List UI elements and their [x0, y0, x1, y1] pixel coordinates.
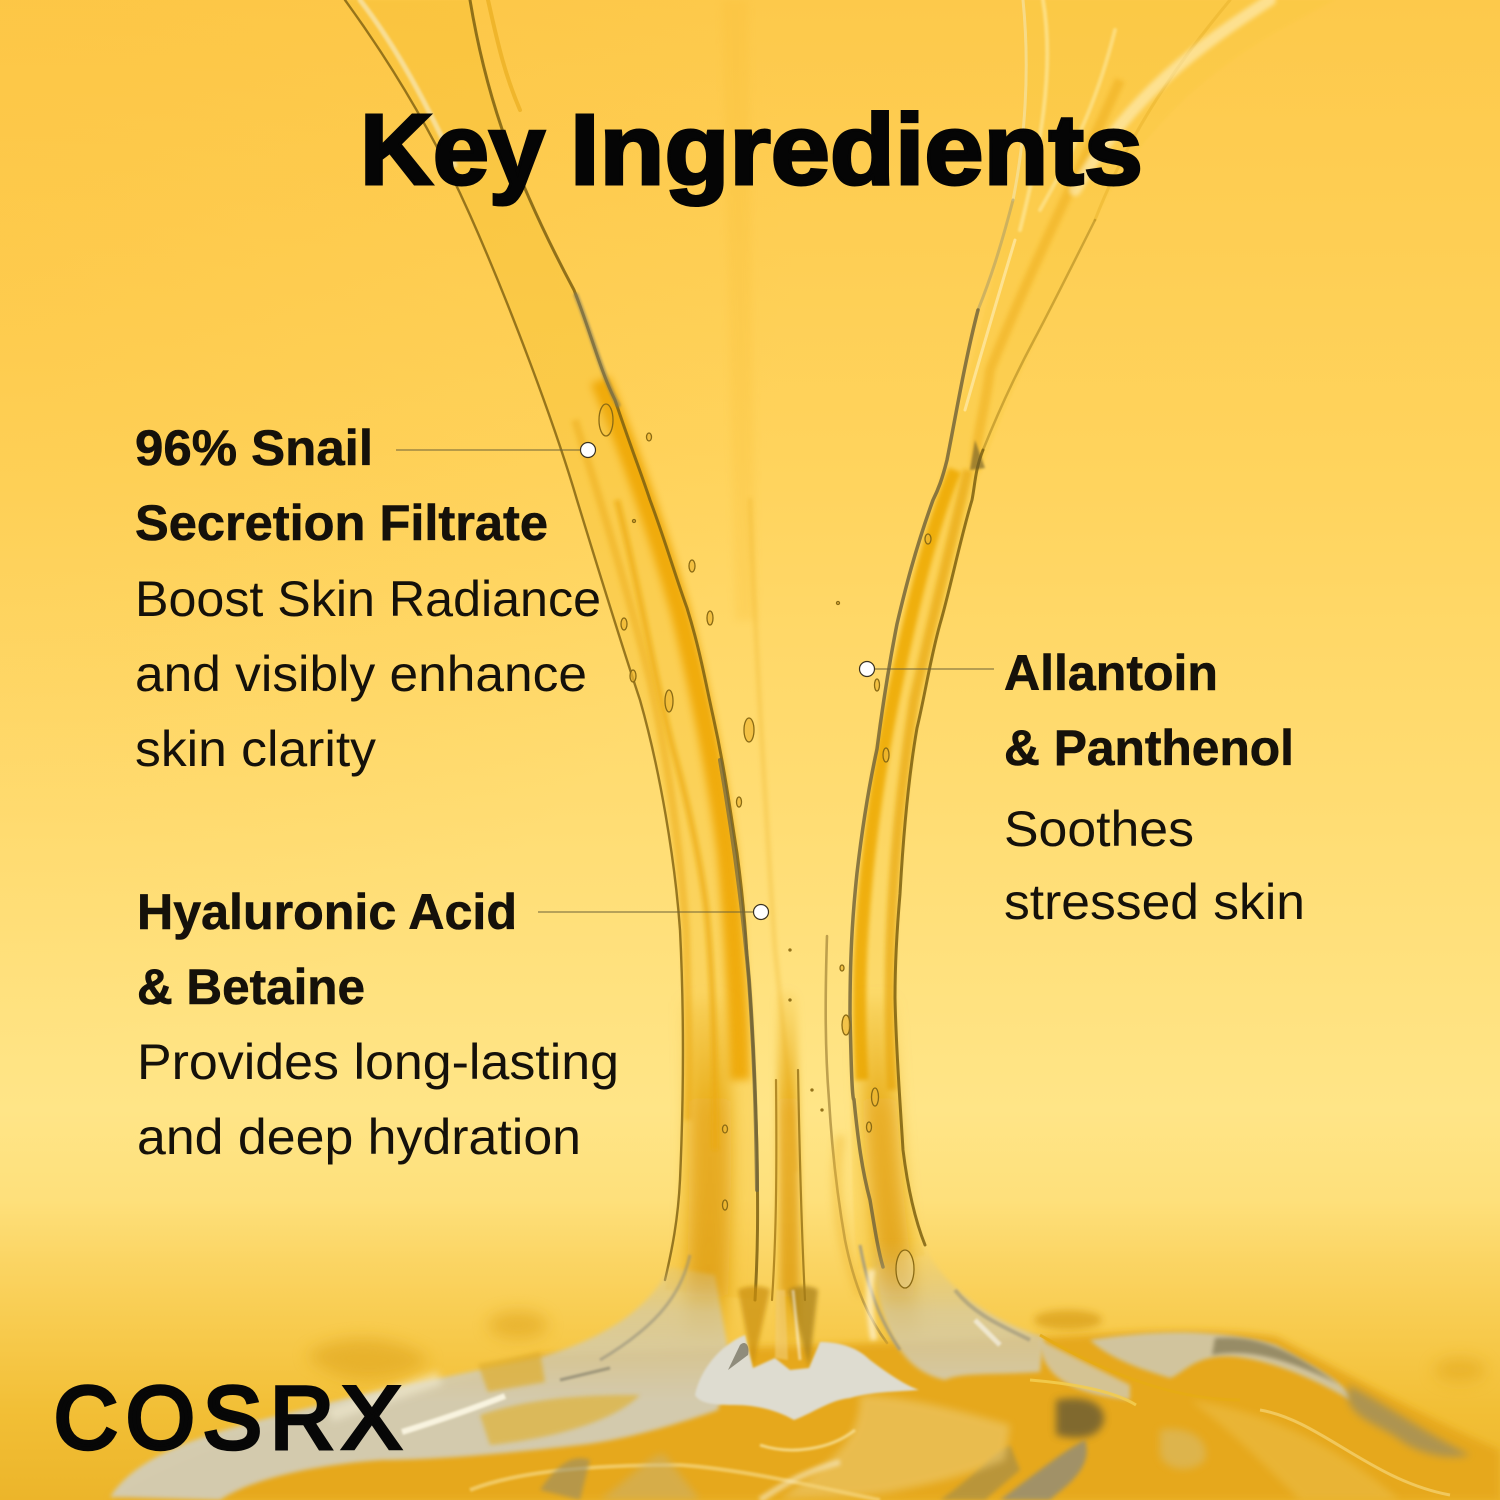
bottom pool of serum [110, 1233, 1500, 1500]
callout line: snail [396, 442, 596, 458]
clear blob where the stream lands [695, 1335, 919, 1420]
callout line: allantoin [860, 662, 994, 676]
ingredient: 96% Snail Secretion Filtrate: Boost Skin Radiance [135, 571, 601, 627]
centre pool [780, 1395, 1010, 1500]
title [360, 94, 1143, 206]
saturated gold bands [575, 380, 740, 1340]
ingredient: Allantoin & Panthenol [1004, 645, 1305, 930]
ingredient: Allantoin & Panthenol: Allantoin [1004, 645, 1218, 701]
title: Ingredients [570, 94, 1143, 206]
ingredient: 96% Snail Secretion Filtrate: Secretion Filtrate [135, 495, 548, 551]
air bubbles [599, 404, 931, 1288]
serum stream: right ribbon [826, 0, 1335, 1343]
right pool: silver ridges [1090, 1332, 1350, 1400]
ingredient: Hyaluronic Acid & Betaine: Provides long-lasting [137, 1034, 619, 1090]
ingredient: Hyaluronic Acid & Betaine: Hyaluronic Acid [137, 884, 517, 940]
ingredient: Hyaluronic Acid & Betaine [137, 884, 619, 1165]
COSRX logo: COSRX [54, 1368, 401, 1467]
ingredient: 96% Snail Secretion Filtrate: skin clarity [135, 721, 376, 777]
ingredient: 96% Snail Secretion Filtrate: 96% Snail [135, 420, 373, 476]
ingredient: Allantoin & Panthenol: stressed skin [1004, 874, 1305, 930]
thin refracted edges [826, 0, 1270, 1343]
title: Key [360, 94, 545, 206]
ingredient: 96% Snail Secretion Filtrate: and visibly enhance [135, 646, 587, 702]
thin refracted edges [345, 0, 758, 1300]
flare: left foot [110, 1267, 730, 1500]
callout line: hyaluronic acid [538, 904, 768, 920]
saturated gold bands [860, 80, 1120, 1340]
serum stream: centre strands [750, 500, 860, 1340]
serum stream: left ribbon [345, 0, 758, 1340]
ingredient: Hyaluronic Acid & Betaine: and deep hydration [137, 1109, 581, 1165]
ingredient: Allantoin & Panthenol: Soothes [1004, 801, 1194, 857]
ingredient: Hyaluronic Acid & Betaine: & Betaine [137, 959, 365, 1015]
ingredient: 96% Snail Secretion Filtrate [135, 420, 601, 777]
gold strand tips [738, 1286, 770, 1367]
ingredient: Allantoin & Panthenol: & Panthenol [1004, 720, 1294, 776]
flare: right foot [868, 1233, 1044, 1380]
